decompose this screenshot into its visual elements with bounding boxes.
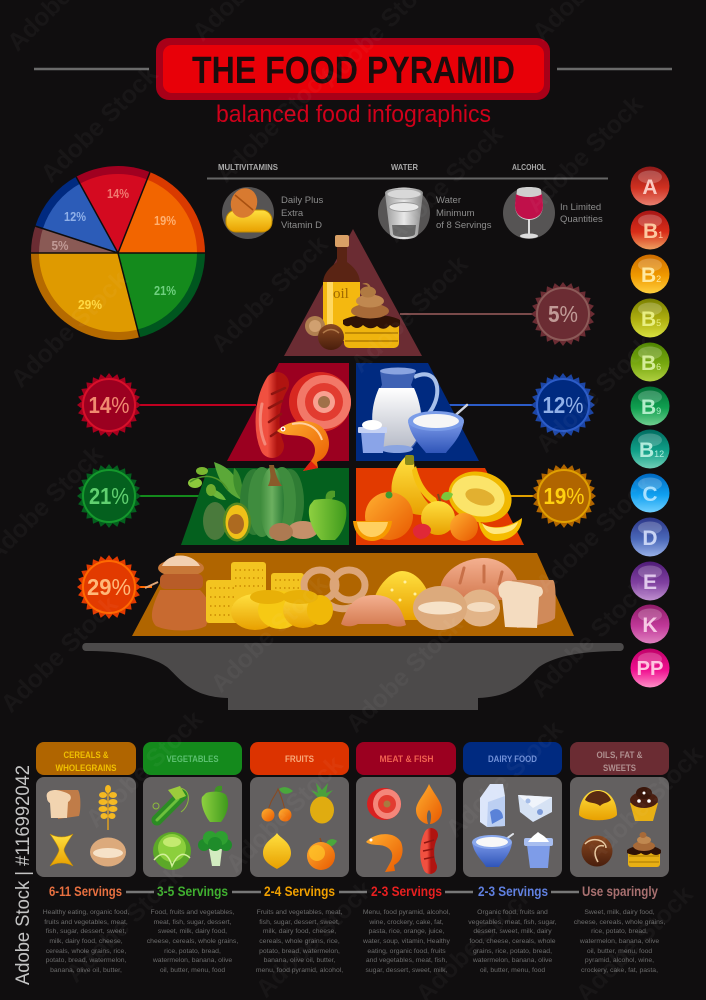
panel: meat and fish header <box>356 742 456 775</box>
servings row: 3-5 Servings <box>157 883 228 899</box>
icon: cottage cheese bowl <box>408 405 467 453</box>
panel: vegetables header: VEGETABLES <box>166 754 218 764</box>
watermark pattern: Adobe Stock <box>205 230 333 358</box>
badge: 29% <box>77 555 141 619</box>
panel: cereals header: CEREALS & <box>64 750 109 760</box>
icon: steak <box>289 372 351 432</box>
icon: lemon <box>263 833 291 869</box>
panel: oils header: SWEETS <box>603 763 636 773</box>
watermark pattern: Adobe Stock <box>525 575 653 703</box>
text: vegetables description: meat, fish, sugar, dessert, <box>154 919 232 926</box>
watermark pattern: Adobe Stock <box>380 120 508 248</box>
title banner <box>34 38 672 100</box>
text: fruits description: fish, sugar, dessert, sweet, <box>259 919 340 926</box>
icon: chocolate truffle <box>582 836 612 866</box>
text: meat description: and vegetables, meat, fish, <box>366 957 447 964</box>
icon: wheat <box>98 785 118 830</box>
pyramid tier: vegetables <box>181 468 349 545</box>
servings row: 2-3 Servings <box>478 883 548 899</box>
vitamin B9 <box>630 386 670 426</box>
panel: vegetables icons <box>143 777 242 877</box>
icon: potatoes <box>269 521 318 541</box>
text: alcohol <box>560 202 603 225</box>
icon: orange slice <box>353 521 392 541</box>
text: meat description: sugar, dessert, sweet, milk, <box>366 967 448 974</box>
panel: meat icons <box>356 777 456 877</box>
text: water: Minimum <box>436 208 475 219</box>
icon: cottage cheese bowl <box>472 834 513 867</box>
badge: 14%: 14% <box>88 392 130 418</box>
text: oils description: cheese, cereals, whole grains, <box>574 919 665 926</box>
text: dairy description: grains, rice, potato, bread, <box>473 948 552 955</box>
vitamin B1 <box>630 210 670 250</box>
watermark pattern: Adobe Stock <box>205 570 333 698</box>
text: vegetables description: cheese, cereals, whole grains, <box>147 938 238 945</box>
icon: round bun <box>372 571 431 620</box>
panel: supplements header: WATER <box>391 162 418 172</box>
icon: cabbage <box>153 832 191 870</box>
icon: steak <box>367 788 401 820</box>
panel: meat and fish header: MEAT & FISH <box>380 754 434 764</box>
panel: oils header <box>570 742 669 775</box>
icon: cherries <box>262 787 293 822</box>
text: vegetables description: watermelon, banana, olive <box>152 957 232 964</box>
watermark pattern: Adobe Stock <box>35 60 163 188</box>
text: multivitamins: Extra <box>281 208 304 219</box>
text: cereals description: cereals, whole grains, rice, <box>46 948 126 955</box>
icon: braided bread <box>231 590 333 630</box>
text: fruits description: Fruits and vegetables, meat, <box>257 909 342 916</box>
vitamin B6 <box>630 342 670 382</box>
pie chart: 12% <box>64 209 86 224</box>
icon: croissant <box>341 595 406 627</box>
pie chart: 5% <box>52 238 69 253</box>
panel: fruits header <box>250 742 349 775</box>
text: meat description <box>362 909 451 974</box>
text: oils description <box>574 909 665 974</box>
icon: toast <box>47 790 80 819</box>
text: meat description: water, soup, vitamin, Healthy <box>362 938 451 945</box>
icon: apple <box>421 492 455 535</box>
icon: sausage <box>423 835 434 867</box>
panel: supplements header: MULTIVITAMINS <box>218 162 278 172</box>
icon: layered cake <box>627 832 661 867</box>
text: dairy description: dessert, sweet, milk, dairy <box>473 928 552 935</box>
pyramid tier: dairy <box>356 363 479 461</box>
vitamin B1: B1 <box>643 220 663 243</box>
panel: fruits icons <box>250 777 349 877</box>
icon: pineapple <box>310 783 334 824</box>
pie chart: 21% <box>154 283 176 298</box>
icon: fish <box>366 834 403 872</box>
icon: bread loaf <box>440 558 519 600</box>
vitamin badges column <box>630 166 670 688</box>
icon: oil bottle <box>323 235 360 341</box>
badge: 29%: 29% <box>87 574 131 600</box>
icon: multivitamin pills <box>222 184 274 239</box>
text: cereals description <box>43 909 129 974</box>
servings row: 2-3 Servings <box>371 883 442 899</box>
vitamin D <box>630 518 670 556</box>
vitamin B2 <box>630 254 670 294</box>
vitamin D: D <box>642 527 658 550</box>
text: alcohol: In Limited <box>560 202 601 213</box>
pie chart: 19% <box>154 213 176 228</box>
text: vegetables description: sweet, milk, dairy food, <box>158 928 227 935</box>
icon: layered cake <box>343 283 400 348</box>
icon: banana <box>392 455 440 515</box>
text: vegetables description: rice, potato, bread, <box>164 948 221 955</box>
panel: vegetables header <box>143 742 242 775</box>
pyramid tier: meat and fish <box>227 363 349 461</box>
text: fruits description: cereals, whole grains, rice, <box>259 938 340 945</box>
badge: 14% <box>77 373 141 437</box>
subtitle: balanced food infographics <box>216 101 491 128</box>
icon: chocolates <box>305 316 344 350</box>
badge: 19% <box>532 464 596 528</box>
icon: farfalle pasta <box>50 834 73 866</box>
text: cereals description: fruits and vegetables, meat, <box>44 919 128 926</box>
icon: leaves <box>188 462 243 500</box>
watermark pattern: Adobe Stock <box>345 250 473 378</box>
text: fruits description: banana, olive oil, butter, <box>264 957 336 964</box>
vitamin B12 <box>630 430 670 468</box>
icon: avocado <box>203 502 251 542</box>
text: cereals description: milk, dairy food, cheese, <box>49 938 123 945</box>
watermark pattern: Adobe Stock <box>80 705 208 833</box>
text: multivitamins: Daily Plus <box>281 195 323 206</box>
panel: supplements header: ALCOHOL <box>512 162 546 172</box>
text: cereals description: Healthy eating, organic food, <box>43 909 129 916</box>
text: oils description: crockery, cake, fat, pasta, <box>581 967 658 974</box>
panel: cereals header: WHOLEGRAINS <box>56 763 116 773</box>
text: multivitamins <box>281 195 323 231</box>
badge: 21% <box>77 464 141 528</box>
pyramid tier: fruits <box>356 468 524 545</box>
text: water <box>436 195 492 231</box>
icon: milk carton <box>480 784 505 827</box>
icon: sausage <box>260 384 285 446</box>
watermark pattern: Adobe Stock <box>440 715 568 843</box>
icon: pretzel <box>304 570 365 609</box>
vitamin C: C <box>642 483 658 506</box>
icon: blue cheese <box>518 795 552 822</box>
pie chart: 29% <box>78 297 102 312</box>
vitamin B5 <box>630 298 670 338</box>
icon: bread rolls <box>413 586 500 630</box>
vitamin B5: B5 <box>641 308 661 331</box>
vitamin K: K <box>642 614 658 637</box>
text: alcohol: Quantities <box>560 214 603 225</box>
vitamin E <box>630 562 670 600</box>
vitamin C <box>630 474 670 512</box>
watermark pattern: Adobe Stock <box>60 860 188 988</box>
icon: chocolate cupcake <box>630 787 658 821</box>
watermark pattern: Adobe Stock <box>580 740 706 868</box>
text: water: of 8 Servings <box>436 220 492 231</box>
icon: salmon steak <box>416 784 442 824</box>
pie chart: 14% <box>107 186 129 201</box>
icon: apple <box>307 838 337 870</box>
text: oils description: watermelon, banana, olive <box>579 938 659 945</box>
pyramid tier: cereals <box>132 553 574 636</box>
pie chart <box>31 166 205 340</box>
panel: supplements header <box>207 162 608 178</box>
icon: bell pepper <box>202 786 228 822</box>
text: cereals description: banana, olive oil, butter, <box>50 967 122 974</box>
text: cereals description: potato, bread, watermelon, <box>46 957 127 964</box>
text: fruits description: menu, food pyramid, alcohol, <box>256 967 343 974</box>
text: meat description: wine, crockery, cake, fat, <box>368 919 444 926</box>
plate <box>82 643 624 710</box>
panel: cereals header <box>36 742 136 775</box>
badge: 12% <box>531 373 595 437</box>
text: oils description: rice, potato, bread, <box>591 928 648 935</box>
panel: oils header: OILS, FAT & <box>596 750 643 760</box>
panel: fruits header: FRUITS <box>285 754 314 764</box>
icon: milk jug <box>372 368 437 453</box>
icon: yogurt <box>524 832 553 868</box>
icon: oil bottle: oil <box>333 286 349 302</box>
watermark pattern: Adobe Stock <box>530 470 658 598</box>
text: cereals description: fish, sugar, dessert, sweet, <box>46 928 126 935</box>
vitamin B2: B2 <box>641 264 661 287</box>
vitamin B12: B12 <box>639 439 664 462</box>
watermark pattern: Adobe Stock <box>530 330 658 458</box>
panel: sweets icons <box>570 777 669 877</box>
icon: green pepper <box>309 491 346 540</box>
icon: toast loaf <box>498 580 556 628</box>
watermark pattern: Adobe Stock <box>220 750 348 878</box>
icon: small orange and strawberry <box>413 513 478 541</box>
vitamin E: E <box>643 571 657 594</box>
icon: fish <box>277 421 329 471</box>
badge: 5%: 5% <box>548 301 578 327</box>
text: fruits description: potato, bread, watermelon, <box>259 948 340 955</box>
text: meat description: eating, organic food, fruits <box>367 948 446 955</box>
icon: flour sack <box>145 556 209 630</box>
badge: 21%: 21% <box>89 483 129 509</box>
badge: 19%: 19% <box>544 483 584 509</box>
watermark pattern: Adobe Stock <box>5 265 133 393</box>
badge: 5% <box>531 282 595 346</box>
vitamin B9: B9 <box>641 396 661 419</box>
text: meat description: pasta, rice, orange, juice, <box>369 928 445 935</box>
text: dairy description <box>468 909 557 974</box>
text: water: Water <box>436 195 461 206</box>
connector lines <box>140 314 534 587</box>
badge: 12%: 12% <box>542 392 584 418</box>
watermark pattern: Adobe Stock <box>250 875 378 1000</box>
text: vegetables description: Food, fruits and vegetables, <box>151 909 235 916</box>
icon: glass of wine <box>503 187 555 239</box>
icon: pudding <box>579 790 617 820</box>
watermark pattern: Adobe Stock <box>340 610 468 738</box>
icon: orange <box>365 492 413 540</box>
text: vegetables description <box>147 909 238 974</box>
text: dairy description: vegetables, meat, fish, sugar, <box>468 919 557 926</box>
vitamin K <box>630 604 670 644</box>
servings row: Use sparingly <box>582 883 658 899</box>
text: fruits description <box>256 909 343 974</box>
icon: bread roll <box>90 838 126 866</box>
servings row: 2-4 Servings <box>264 883 335 899</box>
vitamin PP: PP <box>636 658 664 680</box>
vitamin A: A <box>642 176 658 199</box>
text: dairy description: watermelon, banana, olive <box>472 957 552 964</box>
icon: broccoli <box>198 831 232 866</box>
text: meat description: Menu, food pyramid, alcohol, <box>363 909 450 916</box>
panel: dairy header <box>463 742 562 775</box>
text: dairy description: Organic food, fruits and <box>477 909 548 916</box>
vitamin A <box>630 166 670 206</box>
icon: glass of water <box>378 187 430 239</box>
watermark pattern: Adobe Stock <box>210 60 338 188</box>
text: multivitamins: Vitamin D <box>281 220 322 231</box>
icon: melon <box>443 465 517 529</box>
stock credit: Adobe Stock | #116992042 <box>13 765 34 985</box>
text: vegetables description: oil, butter, menu, food <box>160 967 225 974</box>
text: oils description: Sweet, milk, dairy food, <box>584 909 655 916</box>
text: fruits description: milk, dairy food, cheese, <box>263 928 336 935</box>
text: dairy description: food, cheese, cereals, whole <box>469 938 556 945</box>
vitamin B6: B6 <box>641 352 661 375</box>
watermark pattern: Adobe Stock <box>520 90 648 218</box>
vitamin PP <box>630 648 670 688</box>
servings row <box>49 883 658 899</box>
icon: melon slice <box>478 518 522 541</box>
icon: pumpkin <box>240 465 304 539</box>
text: dairy description: oil, butter, menu, food <box>480 967 545 974</box>
panel: cereals icons <box>36 777 136 877</box>
text: oils description: oil, butter, menu, food <box>587 948 652 955</box>
panel: dairy icons <box>463 777 562 877</box>
icon: yogurt cup <box>358 420 387 453</box>
text: oils description: pyramid, alcohol, wine, <box>585 957 654 964</box>
icon: crackers <box>206 562 304 623</box>
panel: dairy header: DAIRY FOOD <box>488 754 537 764</box>
icon: cucumber <box>153 786 188 820</box>
servings row: 6-11 Servings <box>49 883 122 899</box>
title banner: THE FOOD PYRAMID <box>192 50 515 92</box>
pyramid tier: oils, fat and sweets <box>284 229 422 356</box>
